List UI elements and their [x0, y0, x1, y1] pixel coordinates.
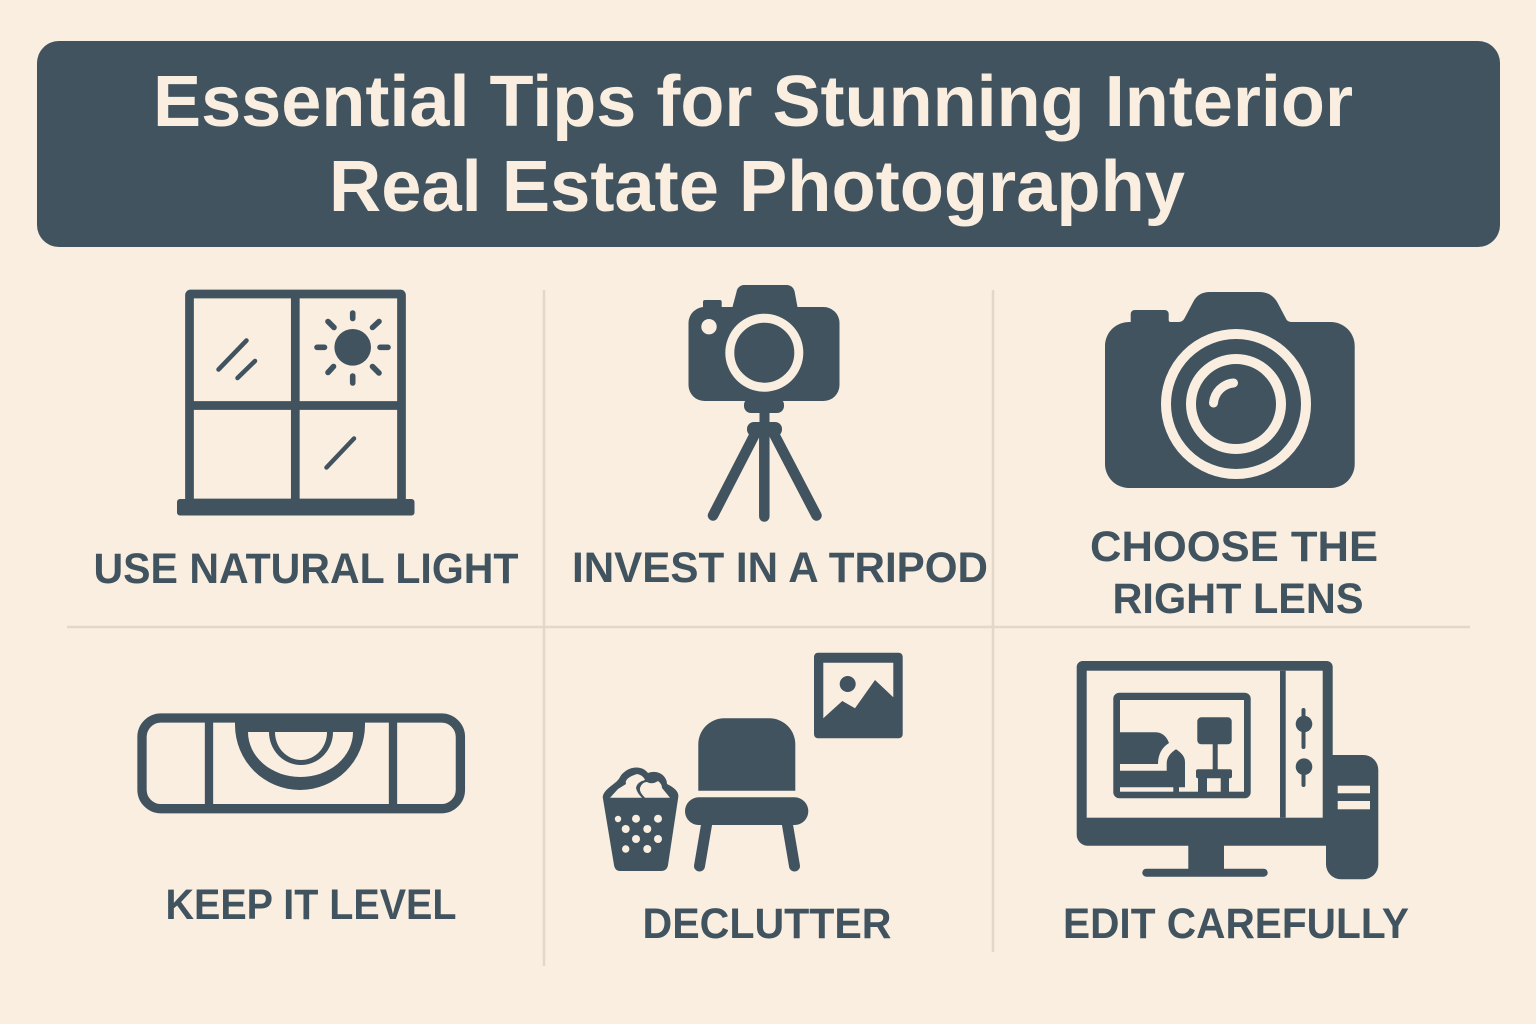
label: edit carefully: EDIT CAREFULLY [1063, 900, 1409, 948]
icon: framed picture [814, 653, 903, 738]
panel: choose the right lens [1090, 292, 1378, 623]
panel: edit carefully [1063, 661, 1409, 948]
label: choose the right lens: RIGHT LENS [1112, 575, 1364, 623]
panel: declutter [603, 653, 903, 948]
icon: spirit level [142, 718, 460, 809]
panel: use natural light [94, 294, 518, 593]
icon: chair [685, 718, 808, 866]
title banner: Essential Tips for Stunning Interior [153, 62, 1353, 142]
title banner [37, 41, 1500, 247]
label: choose the right lens: CHOOSE THE [1090, 523, 1378, 571]
panel: invest in a tripod [572, 285, 988, 592]
label: invest in a tripod: INVEST IN A TRIPOD [572, 544, 988, 592]
label: choose the right lens [1090, 523, 1378, 623]
label: use natural light: USE NATURAL LIGHT [94, 545, 518, 593]
label: keep it level: KEEP IT LEVEL [166, 881, 456, 929]
title banner: Real Estate Photography [329, 147, 1185, 227]
icon: desktop computer with photo editor [1077, 661, 1378, 879]
icon: waste basket [603, 767, 678, 871]
label: declutter: DECLUTTER [642, 900, 892, 948]
panel: keep it level [142, 718, 460, 929]
icon: window with sun [177, 294, 414, 516]
icon: camera on tripod [688, 285, 840, 516]
icon: camera with lens [1105, 292, 1355, 488]
